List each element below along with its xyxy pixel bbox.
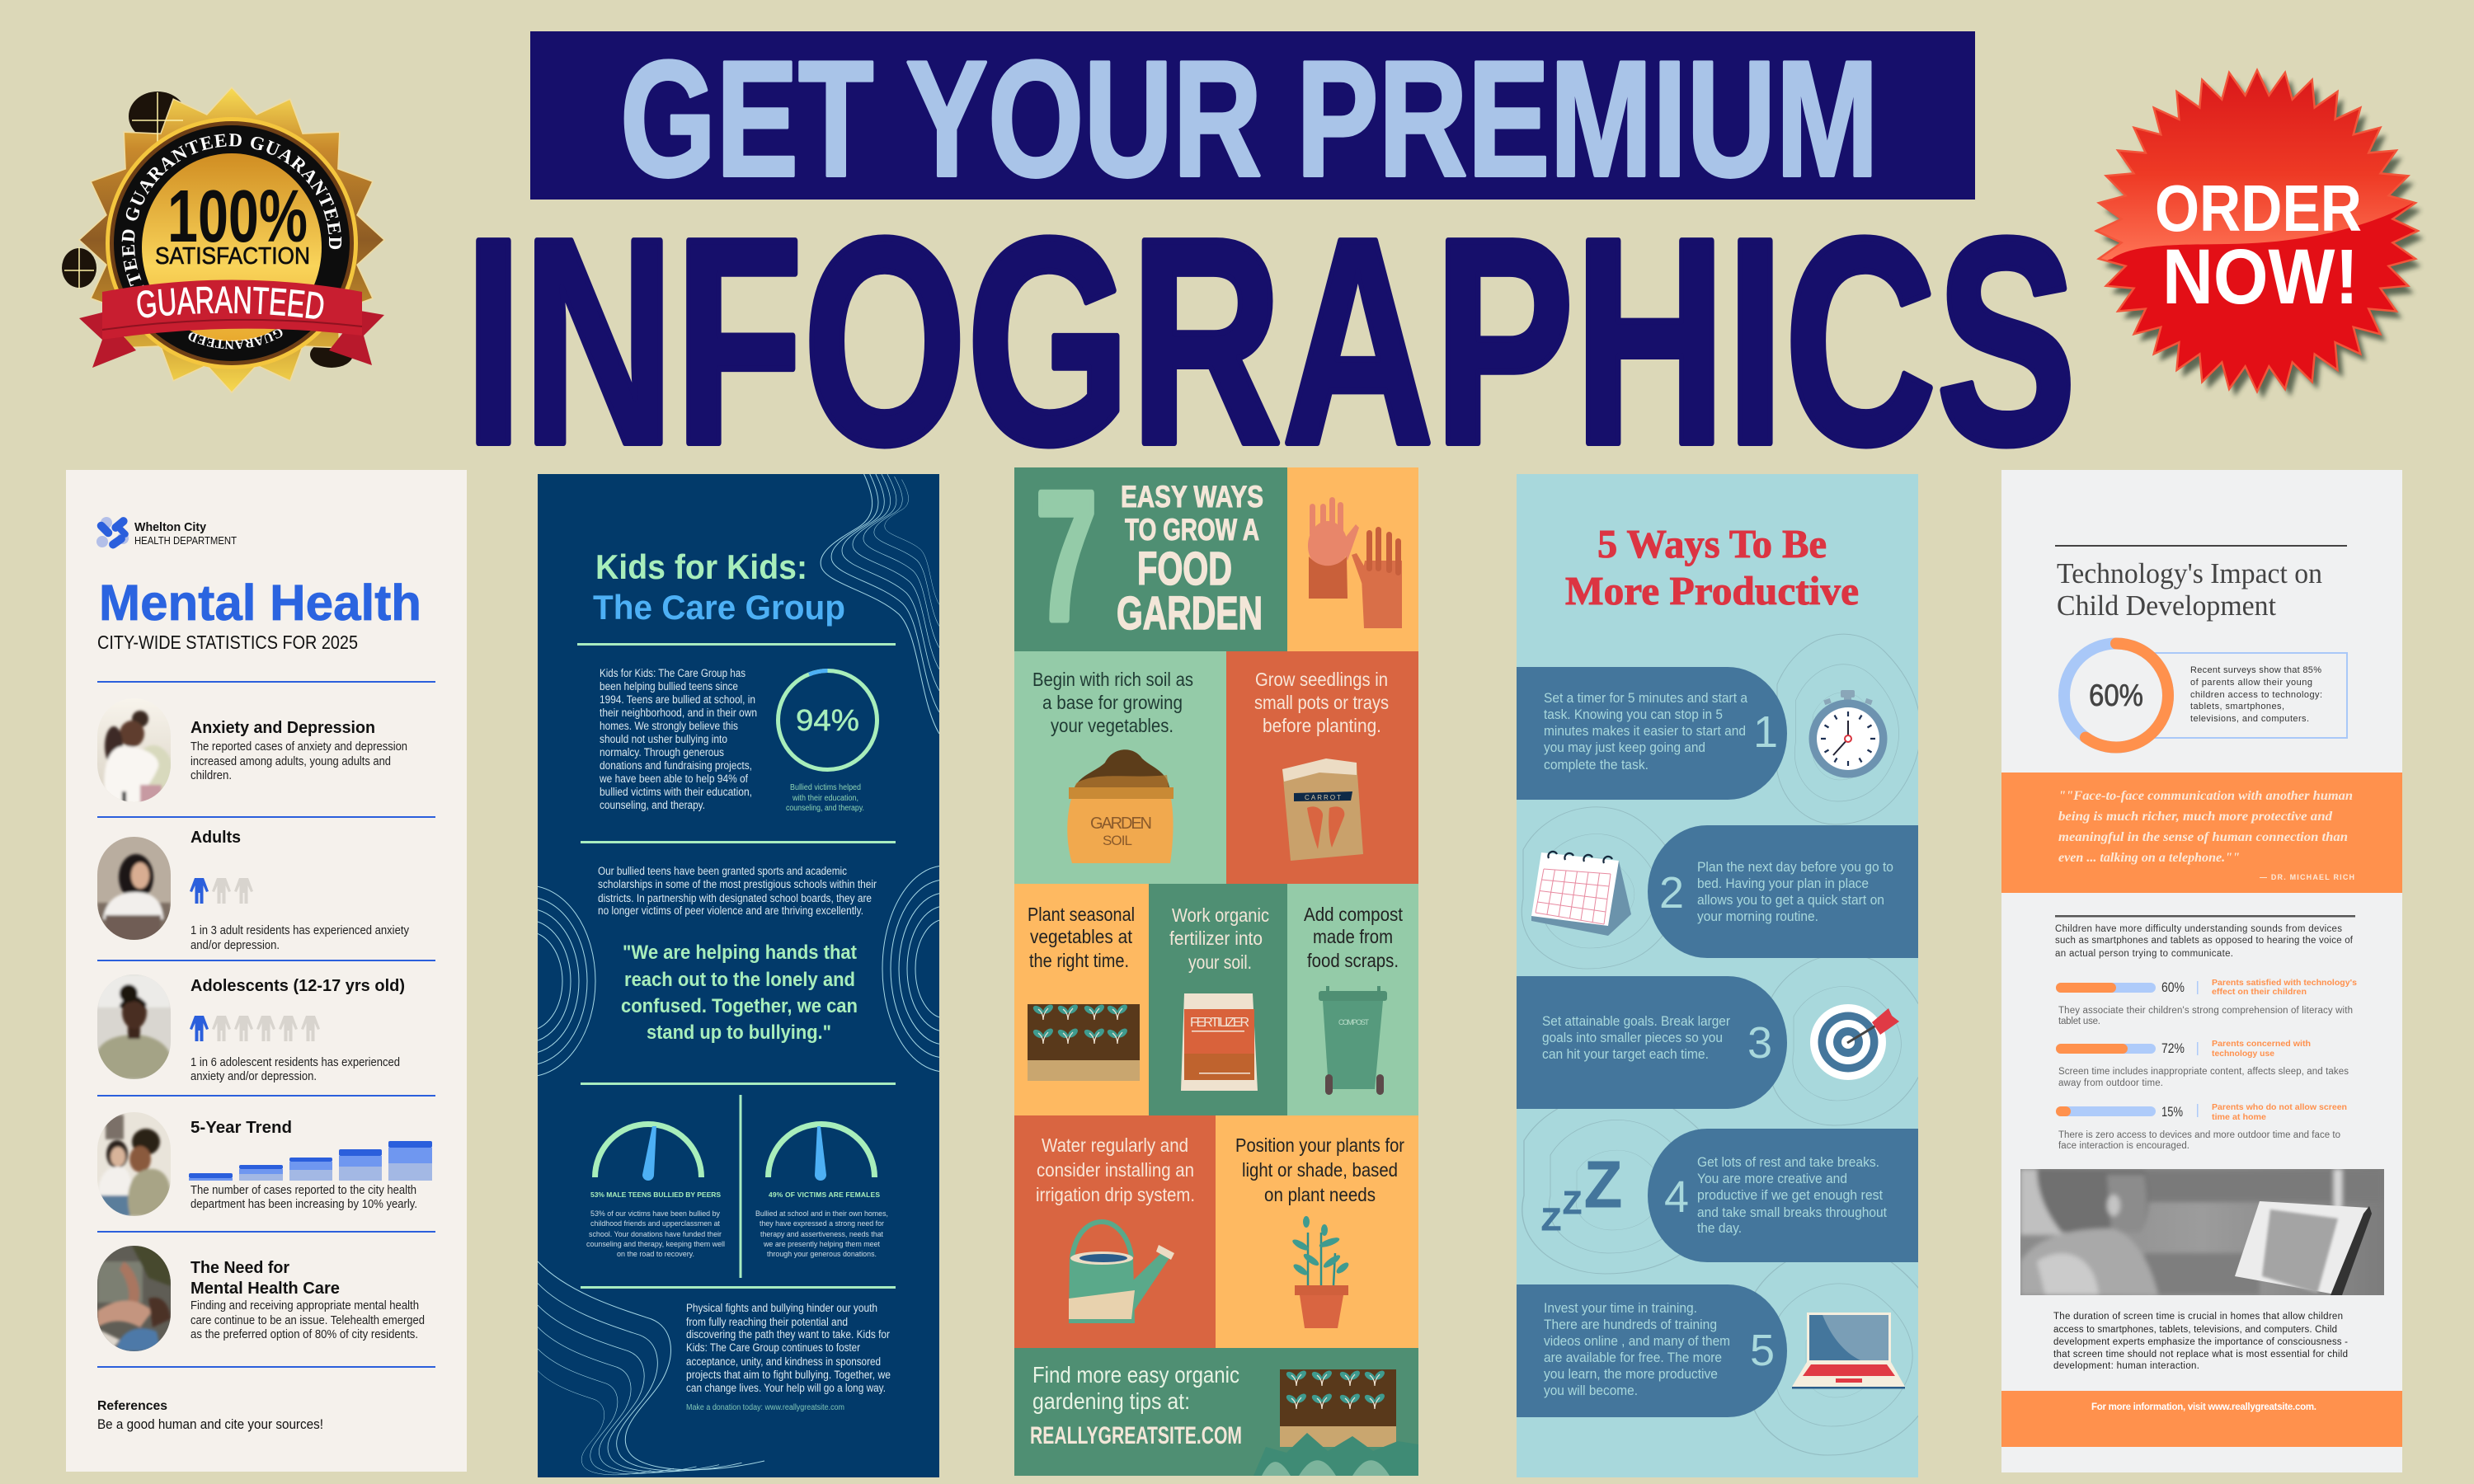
step 4: rest: 4	[1664, 1172, 1689, 1222]
quote band	[2058, 789, 2354, 881]
step 5: training: There are hundreds of training	[1544, 1317, 1717, 1332]
text: closing paragraph: projects that aim to fight bullying. Together, we	[686, 1369, 891, 1381]
quote band: ""Face-to-face communication with another human	[2058, 789, 2353, 803]
text: intro paragraph: counseling, and therapy.	[600, 799, 705, 811]
step 2: plan next day: Plan the next day before you go to	[1697, 860, 1893, 875]
icon: garden soil bag: SOIL	[1103, 833, 1132, 848]
stat: 60% satisfied: effect on their children	[2212, 987, 2307, 997]
gauge: male teens: on the road to recovery.	[617, 1250, 694, 1259]
gauge: females: through your generous donations.	[767, 1250, 877, 1259]
icon: seedling tray with grass	[1253, 1369, 1418, 1476]
photo: child at laptop	[2020, 1169, 2384, 1295]
stat: 15% no screen time: There is zero access to devices and more outdoor time and face to	[2058, 1130, 2340, 1140]
step 2: seedlings: before planting.	[1263, 715, 1381, 736]
step 4: fertilizer	[1169, 904, 1269, 1091]
stat: 72% concerned: technology use	[2212, 1049, 2274, 1059]
quote band: being is much richer, much more protective and	[2058, 810, 2333, 824]
text: need for mental health care: care continue to be an issue. Telehealth emerged	[190, 1314, 425, 1327]
caption: bullied victims: counseling, and therapy.	[786, 804, 864, 813]
stat: 72% concerned	[2056, 1039, 2349, 1088]
references: References	[97, 1399, 167, 1413]
footer: find more tips: REALLYGREATSITE.COM	[1030, 1422, 1242, 1449]
quote: stand up to bullying."	[647, 1021, 831, 1044]
step 1: rich soil: your vegetables.	[1051, 715, 1174, 736]
text: closing paragraph: from fully reaching their potential and	[686, 1316, 848, 1328]
step 6: water: Water regularly and	[1042, 1134, 1188, 1156]
step 4: rest: productive if we get enough rest	[1697, 1188, 1883, 1203]
heading: kids for kids: Kids for Kids:	[595, 547, 807, 586]
text: anxiety and depression: children.	[190, 769, 232, 782]
text: closing paragraph	[686, 1302, 891, 1394]
step 5: training: Invest your time in training.	[1544, 1301, 1697, 1316]
step 6: water	[1036, 1134, 1195, 1323]
gauge: females: therapy and assertiveness, needs that	[760, 1230, 883, 1239]
badge: 100% satisfaction guaranteed: GUARANTEED	[137, 286, 323, 319]
text and chart: 5-year trend: The number of cases reported to the city health	[190, 1184, 416, 1197]
references	[97, 1399, 323, 1432]
step 5: training: 5	[1750, 1326, 1775, 1375]
logo text	[134, 520, 237, 547]
text: second paragraph: districts. In partnership with designated school boards, they are	[598, 892, 872, 904]
footer: more information: For more information, visit www.reallygreatsite.com.	[2091, 1402, 2316, 1412]
quote: "We are helping hands that	[623, 942, 857, 964]
heading: technology's impact	[2057, 557, 2322, 622]
chart: 60% donut: 60%	[2089, 679, 2143, 712]
badge: order now	[2086, 66, 2433, 399]
heading: kids for kids: The Care Group	[593, 588, 845, 627]
step 2: plan next day: allows you to get a quick start on	[1697, 893, 1884, 908]
callout box: recent surveys: tablets, smartphones,	[2190, 702, 2284, 711]
text: intro paragraph	[599, 667, 757, 811]
text and chart: 5-year trend: department has been increasing by 10% yearly.	[190, 1198, 417, 1211]
big number 7: 7	[1036, 454, 1097, 659]
step 1: timer: minutes makes it easier to start and	[1544, 724, 1746, 739]
gauge: male teens: 53% MALE TEENS BULLIED BY PEERS	[590, 1190, 721, 1199]
text: difficulty understanding: such as smartphones and tablets as opposed to hearing the voice of	[2055, 936, 2354, 946]
chart: 60% donut	[2064, 643, 2168, 747]
stat: 60% satisfied	[2056, 978, 2357, 1026]
text: anxiety and depression: increased among adults, young adults and	[190, 755, 391, 768]
caption: bullied victims	[786, 783, 864, 813]
icon: seedling tray	[1028, 1003, 1140, 1081]
text: intro paragraph: their neighborhood, and in their own	[600, 707, 757, 719]
heading: mental health: Mental Health	[99, 575, 421, 631]
step 4: rest: Get lots of rest and take breaks.	[1697, 1155, 1879, 1170]
step 4: rest: and take small breaks throughout	[1697, 1205, 1887, 1220]
step 1: timer: complete the task.	[1544, 758, 1649, 773]
step 1: timer	[1517, 667, 1887, 800]
heading: 5 ways to be more productive: More Productive	[1565, 568, 1859, 613]
step 4: fertilizer: your soil.	[1188, 951, 1252, 973]
icon: carrot seed packet	[1282, 758, 1363, 861]
callout box: recent surveys: televisions, and computers.	[2190, 714, 2309, 724]
gauge: male teens: school. Your donations have funded their	[589, 1230, 722, 1239]
text: duration of screen time: The duration of screen time is crucial in homes that allow children	[2053, 1312, 2343, 1322]
photo: holding hands	[97, 1246, 171, 1351]
step 7: light or shade: on plant needs	[1264, 1184, 1376, 1205]
icon: compost bin: COMPOST	[1338, 1018, 1369, 1026]
heading: technology's impact: Technology's Impact on	[2057, 557, 2322, 589]
text: second paragraph: Our bullied teens have been granted sports and academic	[598, 865, 847, 877]
donation link: Make a donation today: www.reallygreatsite.com	[686, 1403, 844, 1412]
text: need for mental health care: The Need for	[190, 1259, 289, 1277]
callout box: recent surveys	[2144, 653, 2347, 738]
panel: technology's impact	[2001, 470, 2402, 1472]
badge: 100% satisfaction guaranteed: GUARANTEED	[188, 329, 282, 350]
badge: order now: ORDER	[2155, 171, 2362, 245]
photo: young woman	[97, 974, 171, 1079]
step 4: rest	[1541, 1129, 1918, 1262]
step 2: seedlings: Grow seedlings in	[1255, 669, 1388, 690]
step 7: light or shade: light or shade, based	[1242, 1159, 1398, 1181]
step 5: training: you will become.	[1544, 1383, 1638, 1398]
photo: hugging	[97, 708, 171, 802]
stat: 60% satisfied: tablet use.	[2058, 1017, 2100, 1026]
step 1: timer: task. Knowing you can stop in 5	[1544, 707, 1723, 722]
gauge: females	[755, 1125, 888, 1259]
photo: woman with laptop	[97, 837, 171, 942]
icon: sleep zzz: Z	[1563, 1186, 1582, 1221]
text: adolescents	[190, 977, 405, 1083]
step 4: fertilizer: fertilizer into	[1169, 928, 1263, 949]
icon: carrot seed packet: CARROT	[1305, 794, 1341, 801]
stat: 15% no screen time: time at home	[2212, 1112, 2266, 1122]
panel: 5 ways to be more productive	[1517, 474, 1944, 1477]
step 3: goals: can hit your target each time.	[1542, 1047, 1709, 1062]
stat: 72% concerned: away from outdoor time.	[2058, 1078, 2163, 1088]
text and chart: 5-year trend: 5-Year Trend	[190, 1119, 292, 1137]
step 3: goals: goals into smaller pieces so you	[1542, 1031, 1723, 1045]
icon: health department logo	[96, 515, 129, 550]
panel: mental health	[66, 470, 467, 1472]
text: anxiety and depression	[190, 719, 407, 782]
gauge: females: we are presently helping them meet	[763, 1240, 880, 1249]
step 1: timer: 1	[1753, 707, 1778, 757]
step 1: rich soil: a base for growing	[1042, 692, 1183, 713]
text: intro paragraph: bullied victims with their education,	[600, 786, 752, 798]
panel: kids for kids	[538, 474, 939, 1477]
gauge: females: 49% OF VICTIMS ARE FEMALES	[769, 1190, 880, 1199]
chart: 94% donut	[778, 671, 877, 770]
step 5: compost: Add compost	[1304, 904, 1404, 925]
quote	[621, 942, 858, 1044]
step 3: seasonal vegetables	[1028, 904, 1140, 1081]
text: second paragraph	[598, 865, 877, 917]
step 3: seasonal vegetables: the right time.	[1029, 950, 1129, 971]
step 3: seasonal vegetables: Plant seasonal	[1028, 904, 1135, 925]
heading: easy ways to grow a food garden: GARDEN	[1117, 587, 1263, 640]
badge: 100% satisfaction guaranteed: SATISFACTION	[155, 243, 310, 270]
icon: potted plant	[1291, 1216, 1350, 1328]
text and chart: 5-year trend	[189, 1119, 432, 1211]
text: closing paragraph: can change lives. Your help will go a long way.	[686, 1382, 886, 1394]
icon: sleep zzz	[1541, 1148, 1622, 1237]
text: adults: and/or depression.	[190, 939, 280, 952]
text: intro paragraph: homes. We strongly believe this	[600, 720, 738, 732]
text: anxiety and depression: Anxiety and Depression	[190, 719, 375, 737]
icon: laptop	[1792, 1313, 1905, 1388]
chart: 94% donut: 94%	[796, 703, 859, 737]
heading: 5 ways to be more productive: 5 Ways To Be	[1597, 521, 1827, 566]
gauge: females: they have expressed a strong need for	[760, 1219, 884, 1228]
caption: bullied victims: with their education,	[792, 794, 858, 803]
icon: people 1 in 3	[190, 878, 253, 904]
text: need for mental health care: Mental Health Care	[190, 1280, 340, 1298]
text: duration of screen time: development: human interaction.	[2053, 1361, 2199, 1371]
step 2: plan next day: bed. Having your plan in place	[1697, 876, 1869, 891]
step 2: seedlings: small pots or trays	[1254, 692, 1389, 713]
heading: easy ways to grow a food garden	[1117, 480, 1263, 640]
stat: 72% concerned: 72%	[2161, 1040, 2185, 1056]
step 1: timer: you may just keep going and	[1544, 740, 1705, 755]
stat: 15% no screen time: face interaction is encouraged.	[2058, 1141, 2189, 1151]
step 1: rich soil	[1032, 669, 1193, 863]
step 3: goals: Set attainable goals. Break larger	[1542, 1014, 1730, 1029]
text: adolescents: anxiety and/or depression.	[190, 1070, 317, 1083]
badge: 100% satisfaction guaranteed: NTEED GUARANTEED GUARANTEED	[122, 134, 341, 287]
step 5: training: videos online , and many of them	[1544, 1334, 1730, 1349]
logo text: Whelton City	[134, 520, 207, 534]
step 3: seasonal vegetables: vegetables at	[1030, 926, 1133, 947]
quote band: — DR. MICHAEL RICH	[2260, 873, 2354, 881]
step 4: fertilizer: Work organic	[1172, 904, 1269, 926]
icon: sleep zzz: Z	[1584, 1148, 1622, 1221]
text: duration of screen time	[2053, 1312, 2348, 1371]
step 5: compost	[1304, 904, 1404, 1095]
text: difficulty understanding	[2055, 924, 2354, 959]
stat: 60% satisfied: 60%	[2161, 979, 2185, 995]
text: duration of screen time: development experts emphasize the importance of consciousness -	[2053, 1337, 2348, 1347]
stat: 72% concerned: Screen time includes inappropriate content, affects sleep, and takes	[2058, 1067, 2349, 1077]
gauge: male teens: 53% of our victims have been bullied by	[590, 1209, 720, 1219]
heading: easy ways to grow a food garden: TO GROW A	[1125, 513, 1259, 547]
text: difficulty understanding: an actual person trying to communicate.	[2055, 949, 2233, 959]
text: closing paragraph: Kids: The Care Group continues to foster	[686, 1341, 860, 1354]
badge: 100% satisfaction guaranteed: 100%	[167, 176, 308, 258]
text: intro paragraph: been helping bullied teens since	[600, 680, 738, 693]
icon: fertilizer bag: FERTILIZER	[1190, 1016, 1249, 1030]
badge: order now: NOW!	[2162, 233, 2359, 321]
step 1: timer: Set a timer for 5 minutes and start a	[1544, 691, 1748, 706]
icon: calendar	[1531, 852, 1631, 936]
text: anxiety and depression: The reported cases of anxiety and depression	[190, 740, 407, 754]
icon: garden soil bag: GARDEN	[1090, 815, 1152, 833]
callout box: recent surveys: children access to technology:	[2190, 690, 2322, 700]
callout box: recent surveys: Recent surveys show that 85%	[2190, 665, 2321, 675]
step 2: plan next day: your morning routine.	[1697, 909, 1818, 924]
step 3: goals	[1517, 976, 1899, 1109]
heading: technology's impact: Child Development	[2057, 589, 2276, 622]
step 5: training	[1517, 1284, 1905, 1417]
stat: 60% satisfied: They associate their children's strong comprehension of literacy with	[2058, 1006, 2353, 1016]
photo: two women talking	[97, 1112, 171, 1216]
text: duration of screen time: that screen time should not replace what is most essential for child	[2053, 1350, 2348, 1360]
stat: 72% concerned: Parents concerned with	[2212, 1039, 2311, 1049]
caption: bullied victims: Bullied victims helped	[790, 783, 861, 792]
text: second paragraph: no longer victims of peer violence and are thriving excellently.	[598, 904, 863, 917]
step 7: light or shade	[1235, 1134, 1404, 1328]
step 4: rest: You are more creative and	[1697, 1172, 1847, 1186]
text: difficulty understanding: Children have more difficulty understanding sounds from devices	[2055, 924, 2342, 934]
gauge: male teens: counseling and therapy, keeping them well	[586, 1240, 725, 1249]
quote: reach out to the lonely and	[624, 969, 855, 991]
icon: gloves	[1308, 497, 1402, 628]
text: adults: Adults	[190, 829, 241, 847]
text: adults: 1 in 3 adult residents has experienced anxiety	[190, 924, 410, 937]
stat: 15% no screen time: 15%	[2161, 1104, 2183, 1120]
quote: confused. Together, we can	[621, 995, 858, 1017]
step 2: plan next day: 2	[1659, 868, 1684, 918]
step 5: compost: made from	[1313, 926, 1393, 947]
icon: garden soil bag	[1067, 749, 1174, 863]
gauge: females: Bullied at school and in their own homes,	[755, 1209, 888, 1219]
gauge: male teens: childhood friends and upperclassmen at	[590, 1219, 720, 1228]
text: second paragraph: scholarships in some of the most prestigious schools within their	[598, 878, 877, 890]
text: need for mental health care	[190, 1259, 425, 1341]
heading: 5 ways to be more productive	[1565, 521, 1859, 613]
text: intro paragraph: donations and fundraising projects,	[600, 759, 752, 772]
step 4: rest: the day.	[1697, 1221, 1742, 1236]
icon: fertilizer bag	[1181, 993, 1258, 1091]
text: intro paragraph: Kids for Kids: The Care Group has	[600, 667, 745, 679]
step 2: plan next day	[1531, 825, 1918, 958]
quote band: meaningful in the sense of human connection than	[2058, 830, 2348, 844]
heading: kids for kids	[593, 547, 845, 627]
callout box: recent surveys: of parents allow their young	[2190, 678, 2312, 688]
text: need for mental health care: Finding and receiving appropriate mental health	[190, 1299, 419, 1313]
step 5: training: are available for free. The more	[1544, 1350, 1722, 1365]
panel: food garden	[1014, 454, 1418, 1476]
text: adolescents: 1 in 6 adolescent residents has experienced	[190, 1056, 400, 1069]
step 1: rich soil: Begin with rich soil as	[1032, 669, 1193, 690]
icon: watering can	[1069, 1222, 1174, 1323]
text: closing paragraph: discovering the path they want to take. Kids for	[686, 1328, 890, 1341]
text: closing paragraph: Physical fights and bullying hinder our youth	[686, 1302, 877, 1314]
badge: 100% satisfaction guaranteed	[62, 87, 385, 393]
text: duration of screen time: access to smartphones, tablets, televisions, and computers. Child	[2053, 1325, 2337, 1335]
icon: sleep zzz: Z	[1541, 1203, 1561, 1237]
step 7: light or shade: Position your plants for	[1235, 1134, 1404, 1156]
footer: find more tips: gardening tips at:	[1032, 1388, 1190, 1414]
stat: 15% no screen time: Parents who do not allow screen	[2212, 1102, 2347, 1112]
step 3: goals: 3	[1747, 1018, 1772, 1068]
stat: 60% satisfied: Parents satisfied with technology's	[2212, 978, 2357, 988]
step 6: water: consider installing an	[1037, 1159, 1194, 1181]
icon: compost bin	[1319, 986, 1387, 1095]
text: intro paragraph: we have been able to help 94% of	[599, 773, 748, 785]
bar chart: five-year trend	[189, 1141, 432, 1181]
step 2: seedlings	[1254, 669, 1389, 861]
stat: 15% no screen time	[2056, 1102, 2347, 1151]
quote band: even ... talking on a telephone.""	[2058, 851, 2240, 865]
text: closing paragraph: acceptance, unity, and kindness in sponsored	[686, 1355, 881, 1368]
text: adolescents: Adolescents (12-17 yrs old)	[190, 977, 405, 995]
banner: get your premium: GET YOUR PREMIUM	[620, 27, 1879, 211]
text: need for mental health care: as the preferred option of 80% of city residents.	[190, 1328, 418, 1341]
heading: easy ways to grow a food garden: FOOD	[1137, 542, 1232, 595]
icon: people 1 in 6	[190, 1016, 320, 1041]
heading: easy ways to grow a food garden: EASY WAYS	[1121, 480, 1263, 514]
footer: find more tips	[1030, 1362, 1418, 1476]
step 6: water: irrigation drip system.	[1036, 1184, 1195, 1205]
text: adults	[190, 829, 410, 952]
gauge: male teens	[586, 1125, 725, 1259]
text: intro paragraph: should not usher bullying into	[600, 733, 727, 745]
references: Be a good human and cite your sources!	[97, 1416, 323, 1432]
step 5: training: you learn, the more productive	[1544, 1367, 1718, 1382]
logo text: HEALTH DEPARTMENT	[134, 534, 237, 547]
text: intro paragraph: normalcy. Through generous	[600, 746, 724, 758]
icon: stopwatch	[1809, 690, 1887, 778]
icon: target	[1810, 1004, 1899, 1080]
subheading: CITY-WIDE STATISTICS FOR 2025	[97, 632, 358, 653]
footer: find more tips: Find more easy organic	[1032, 1362, 1239, 1388]
step 5: compost: food scraps.	[1307, 950, 1399, 971]
text: intro paragraph: 1994. Teens are bullied at school, in	[600, 693, 755, 706]
